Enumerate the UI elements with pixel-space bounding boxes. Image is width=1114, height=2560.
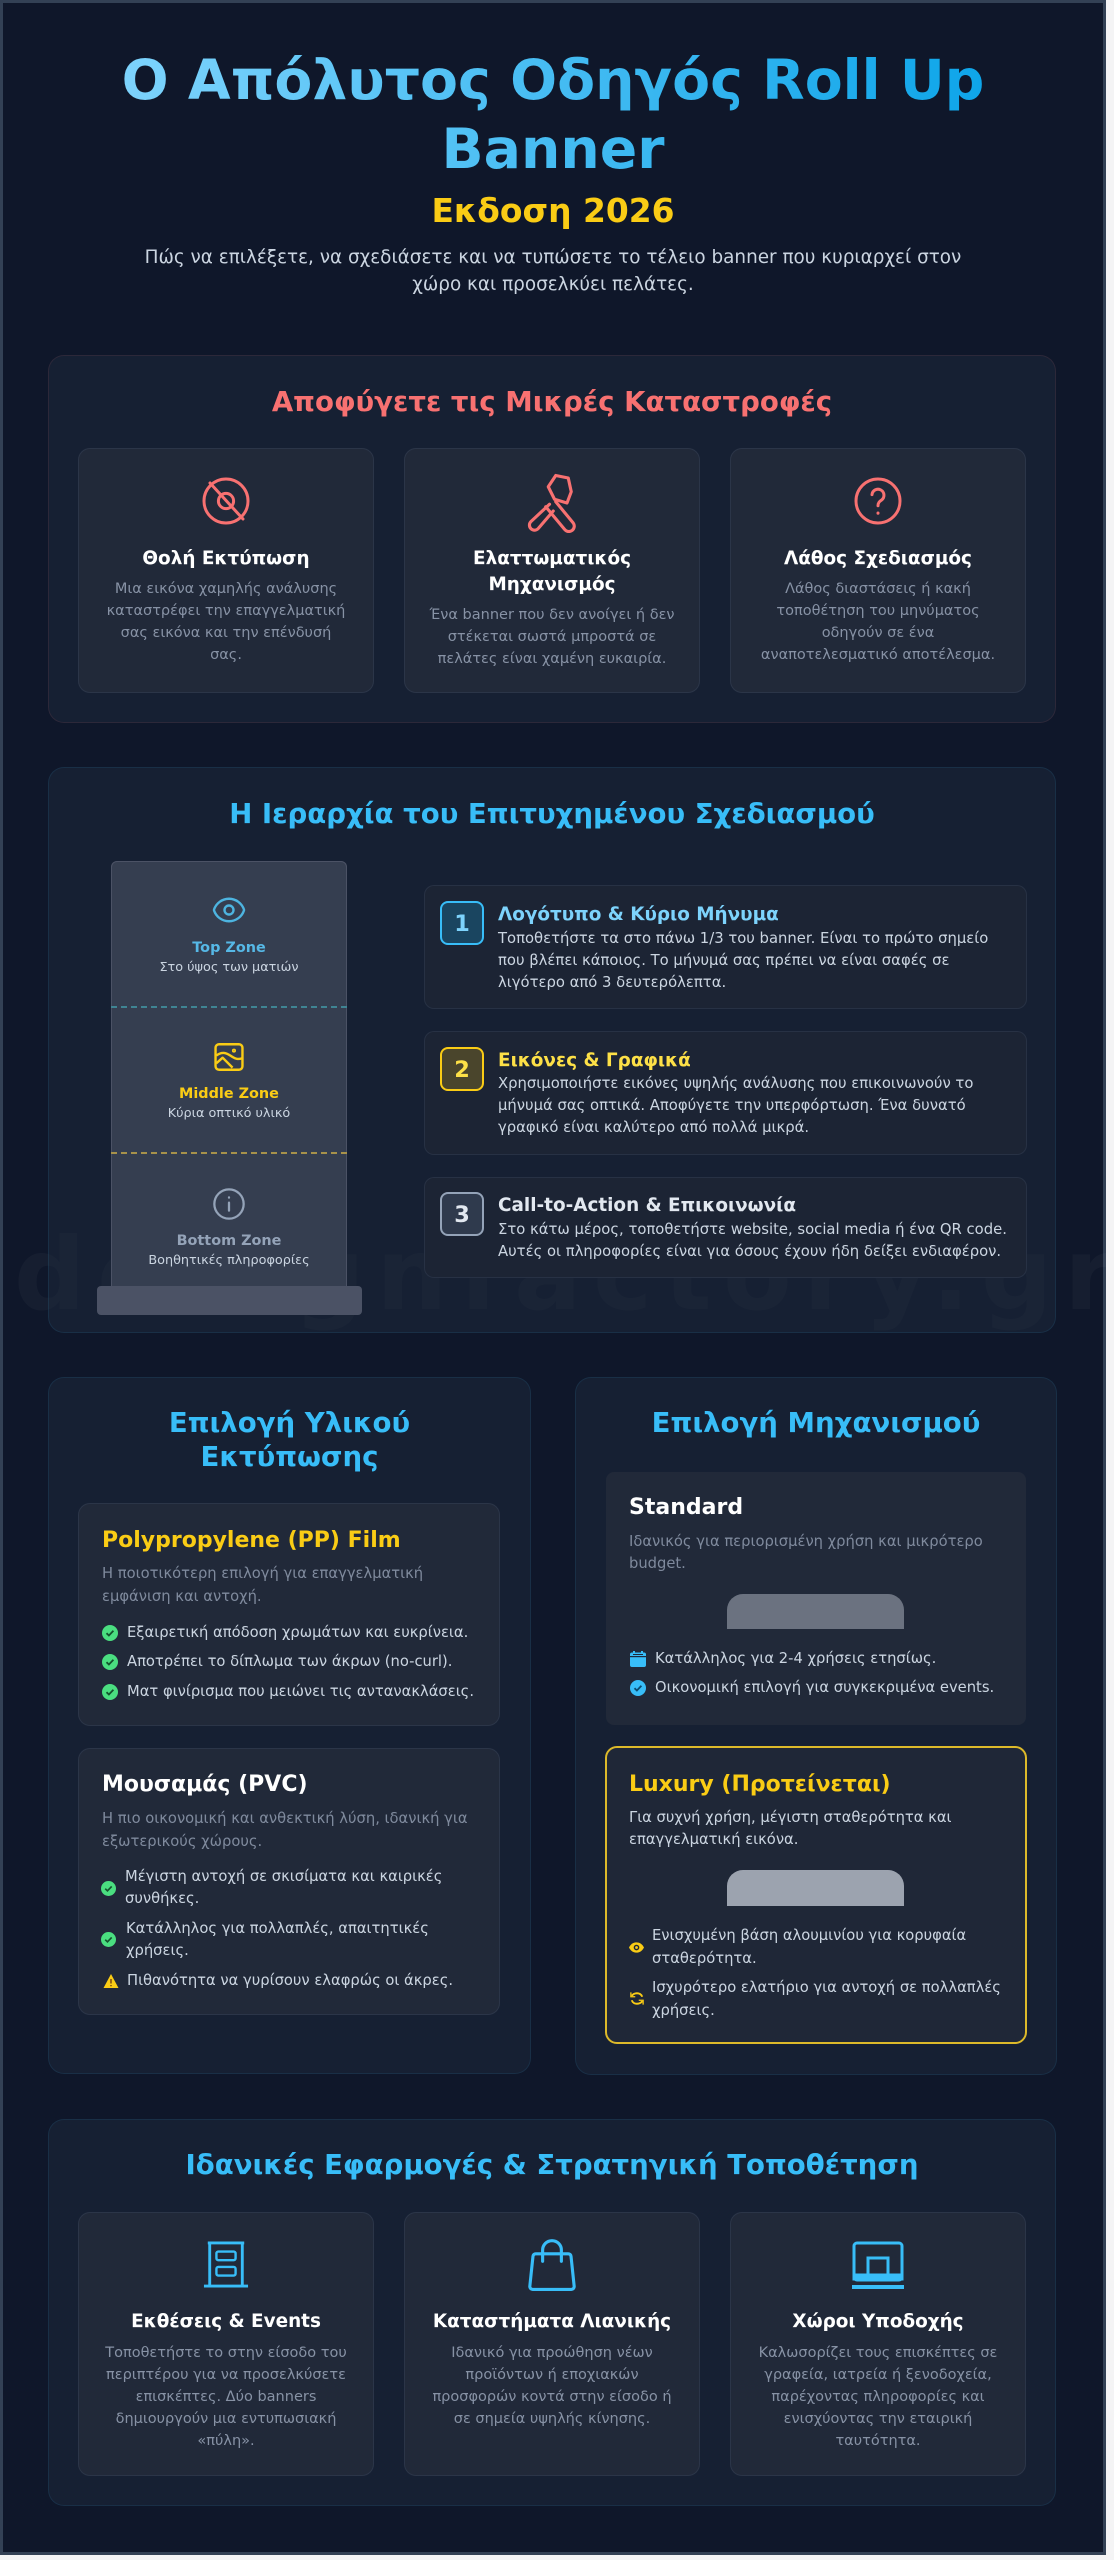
card text (404, 2342, 700, 2430)
icon: shopping bag (522, 2235, 582, 2295)
list item: Ισχυρότερο ελατήριο για αντοχή σε πολλαπλές (652, 1979, 1001, 1996)
icon: check (101, 1932, 116, 1947)
icon: info (213, 1188, 245, 1220)
card title: Ελαττωματικός (473, 548, 631, 569)
card text: καταστρέφει την επαγγελματική (107, 603, 345, 619)
card: PVC (78, 1748, 500, 2015)
card text: οδηγούν σε ένα (822, 625, 934, 641)
step text (498, 1221, 1007, 1260)
card title: Χώροι Υποδοχής (792, 2311, 964, 2332)
card text: επισκέπτες. Δύο banners (136, 2389, 316, 2405)
card text: Λάθος διαστάσεις ή κακή (785, 581, 971, 597)
panel: common mistakes (48, 355, 1056, 723)
title: Ο Απόλυτος Οδηγός Roll Up (122, 49, 984, 113)
icon: eye (629, 1942, 644, 1953)
icon: blurred target (202, 478, 250, 524)
heading: material (169, 1406, 410, 1473)
icon: check (102, 1625, 118, 1641)
card title: Εκθέσεις & Events (131, 2311, 321, 2332)
card text: προσφορών κοντά στην είσοδο ή (432, 2389, 672, 2405)
card text: εμφάνιση και αντοχή. (102, 1588, 262, 1604)
card title (473, 548, 631, 595)
card text: εξωτερικούς χώρους. (102, 1832, 262, 1850)
card text: σε σημεία υψηλής κίνησης. (454, 2411, 650, 2427)
icon: wrench and screwdriver (528, 474, 576, 533)
zone: top (111, 861, 347, 1008)
card text: προϊόντων ή εποχιακών (465, 2367, 639, 2383)
zone label: Top Zone (192, 940, 266, 956)
banner body (111, 861, 347, 1291)
card text (629, 1809, 952, 1848)
number badge: 2 (454, 1057, 470, 1083)
list item: χρήσεις. (126, 1942, 189, 1959)
list item: Μέγιστη αντοχή σε σκισίματα και καιρικές (125, 1868, 442, 1885)
zone: middle (111, 1008, 347, 1154)
card text: ταυτότητα. (835, 2433, 921, 2449)
list item: Ματ φινίρισμα που μειώνει τις αντανακλάσεις. (127, 1683, 474, 1700)
zone note: Βοηθητικές πληροφορίες (148, 1253, 310, 1268)
card text: στέκεται σωστά μπροστά σε (448, 629, 656, 645)
roll up banner diagram (97, 861, 362, 1315)
intro text (145, 247, 961, 294)
step title: Call-to-Action & Επικοινωνία (498, 1195, 796, 1216)
number badge (440, 901, 484, 945)
intro text: χώρο και προσελκύει πελάτες. (412, 274, 694, 294)
mechanism base shape (727, 1594, 904, 1629)
icon: question mark (854, 478, 902, 524)
title (122, 49, 984, 182)
step text: Στο κάτω μέρος, τοποθετήστε website, social media ή ένα QR code. (498, 1221, 1007, 1238)
panel: print material (48, 1377, 531, 2074)
icon: check (630, 1680, 646, 1696)
card text: Ένα banner που δεν ανοίγει ή δεν (429, 607, 675, 623)
card text: Τοποθετήστε το στην είσοδο του (105, 2345, 347, 2361)
icon: check (101, 1881, 116, 1896)
card: exhibitions (78, 2212, 374, 2476)
step text: Χρησιμοποιήστε εικόνες υψηλής ανάλυσης που επικοινωνούν το (498, 1075, 973, 1092)
card title: Μηχανισμός (488, 574, 615, 595)
list item (652, 1927, 966, 1967)
number badge: 1 (454, 911, 470, 937)
card text: πελάτες είναι χαμένη ευκαιρία. (438, 651, 666, 667)
card: blurry print (78, 448, 374, 693)
card title: Polypropylene (PP) Film (102, 1528, 401, 1553)
card text: Ιδανικό για προώθηση νέων (451, 2345, 653, 2361)
card text (102, 1810, 468, 1850)
card text: παρέχοντας πληροφορίες και (771, 2389, 985, 2405)
card title: Standard (629, 1495, 743, 1520)
card text: «πύλη». (197, 2433, 255, 2449)
card text: ενισχύοντας την εταιρική (784, 2411, 972, 2427)
card text: τοποθέτηση του μηνύματος (776, 603, 980, 619)
card text (730, 2342, 1026, 2452)
heading: mistakes: Αποφύγετε τις Μικρές Καταστροφές (272, 385, 832, 418)
step 2 (424, 1031, 1027, 1155)
icon: refresh (630, 1992, 644, 2005)
step text: που βλέπει κάποιος. Το μήνυμά σας πρέπει να είναι σαφές σε (498, 952, 949, 969)
number badge (440, 1192, 484, 1236)
step title: Εικόνες & Γραφικά (498, 1050, 691, 1071)
feature list (101, 1868, 453, 1989)
icon: check (102, 1654, 118, 1670)
feature list (102, 1624, 474, 1700)
heading: mechanism: Επιλογή Μηχανισμού (652, 1406, 980, 1439)
card text: επαγγελματική εικόνα. (629, 1831, 798, 1848)
list item: σταθερότητα. (652, 1950, 757, 1967)
card text: αναποτελεσματικό αποτέλεσμα. (761, 647, 995, 663)
card: standard (606, 1472, 1026, 1725)
card text (629, 1533, 983, 1572)
intro text: Πώς να επιλέξετε, να σχεδιάσετε και να τυπώσετε το τέλειο banner που κυριαρχεί στον (145, 247, 961, 268)
step text (498, 930, 988, 991)
list item: Ενισχυμένη βάση αλουμινίου για κορυφαία (652, 1927, 966, 1944)
card text: γραφεία, ιατρεία ή ξενοδοχεία, (764, 2367, 992, 2383)
card text: Για συχνή χρήση, μέγιστη σταθερότητα και (629, 1809, 952, 1826)
heading: material: Επιλογή Υλικού (169, 1406, 410, 1439)
card title: Καταστήματα Λιανικής (433, 2311, 671, 2332)
card text: Η πιο οικονομική και ανθεκτική λύση, ιδανική για (102, 1810, 468, 1827)
icon: exhibition stand (204, 2242, 248, 2288)
card title: Λάθος Σχεδιασμός (784, 548, 972, 569)
step text: λιγότερο από 3 δευτερόλεπτα. (498, 974, 726, 991)
icon: reception screen (851, 2240, 905, 2290)
card text (107, 581, 345, 663)
card: faulty mechanism (404, 448, 700, 693)
card title: Luxury (Προτείνεται) (629, 1772, 891, 1797)
card: retail stores (404, 2212, 700, 2476)
number badge: 3 (454, 1202, 470, 1228)
card: wrong design (730, 448, 1026, 693)
heading: hierarchy: Η Ιεραρχία του Επιτυχημένου Σχεδιασμού (229, 797, 875, 830)
step 1 (424, 885, 1027, 1009)
icon: image (214, 1043, 244, 1071)
list item: Κατάλληλος για 2-4 χρήσεις ετησίως. (655, 1650, 936, 1667)
step text (498, 1075, 973, 1136)
heading: material: Εκτύπωσης (200, 1440, 378, 1473)
card text: σας. (210, 647, 242, 663)
list item: συνθήκες. (125, 1890, 199, 1907)
watermark: designfactory.gr (14, 1216, 1106, 1333)
step 3 (424, 1177, 1027, 1278)
title: Banner (442, 118, 664, 182)
card text (105, 2345, 347, 2449)
mechanism base shape (727, 1870, 904, 1906)
icon: eye (212, 898, 246, 922)
panel: mechanism (575, 1377, 1057, 2075)
panel: applications (48, 2119, 1056, 2506)
card text: περιπτέρου για να προσελκύσετε (106, 2367, 346, 2383)
icon: check (102, 1684, 118, 1700)
card: PP film (78, 1503, 500, 1726)
card text: σας εικόνα και την επένδυσή (121, 625, 331, 641)
step text: γραφικό είναι καλύτερο από πολλά μικρά. (498, 1119, 809, 1136)
zone label: Middle Zone (179, 1086, 279, 1102)
card text: budget. (629, 1555, 686, 1572)
list item (125, 1868, 442, 1907)
card title: Θολή Εκτύπωση (142, 548, 310, 569)
heading: applications: Ιδανικές Εφαρμογές & Στρατηγική Τοποθέτηση (186, 2148, 918, 2181)
panel: design hierarchy (48, 767, 1056, 1333)
list item: χρήσεις. (652, 2002, 715, 2019)
list item: Εξαιρετική απόδοση χρωμάτων και ευκρίνεια. (127, 1624, 468, 1641)
card: luxury recommended (605, 1746, 1027, 2044)
step text: μήνυμά σας οπτικά. Αποφύγετε την υπερφόρτωση. Ένα δυνατό (498, 1097, 966, 1114)
icon: calendar (630, 1651, 646, 1667)
card text (761, 581, 995, 663)
subtitle: Εκδοση 2026 (431, 191, 675, 230)
list item (126, 1920, 429, 1959)
zone note: Κύρια οπτικό υλικό (168, 1106, 290, 1121)
icon: warning triangle (104, 1974, 118, 1988)
zone label: Bottom Zone (177, 1233, 281, 1249)
list item: Οικονομική επιλογή για συγκεκριμένα events. (655, 1679, 994, 1696)
list item: Πιθανότητα να γυρίσουν ελαφρώς οι άκρες. (127, 1972, 453, 1989)
card text (102, 1565, 423, 1604)
card text: δημιουργούν μια εντυπωσιακή (116, 2411, 336, 2427)
zone: bottom (148, 1188, 310, 1268)
card text: Μια εικόνα χαμηλής ανάλυσης (115, 581, 337, 597)
step text: Αυτές οι πληροφορίες είναι για όσους έχουν ήδη δείξει ενδιαφέρον. (498, 1243, 1001, 1260)
list item: Αποτρέπει το δίπλωμα των άκρων (no-curl). (127, 1653, 452, 1670)
step title: Λογότυπο & Κύριο Μήνυμα (498, 904, 779, 925)
banner base (97, 1286, 362, 1315)
zone note: Στο ύψος των ματιών (159, 960, 299, 975)
list item: Κατάλληλος για πολλαπλές, απαιτητικές (126, 1920, 429, 1937)
card title: Μουσαμάς (PVC) (102, 1772, 308, 1797)
card text (429, 607, 675, 667)
card: reception areas (730, 2212, 1026, 2476)
number badge (440, 1047, 484, 1091)
list item (652, 1979, 1001, 2019)
card text: Η ποιοτικότερη επιλογή για επαγγελματική (102, 1565, 423, 1582)
step text: Τοποθετήστε τα στο πάνω 1/3 του banner. Είναι το πρώτο σημείο (498, 930, 988, 947)
card text: Ιδανικός για περιορισμένη χρήση και μικρότερο (629, 1533, 983, 1550)
card text: Καλωσορίζει τους επισκέπτες σε (759, 2345, 997, 2361)
